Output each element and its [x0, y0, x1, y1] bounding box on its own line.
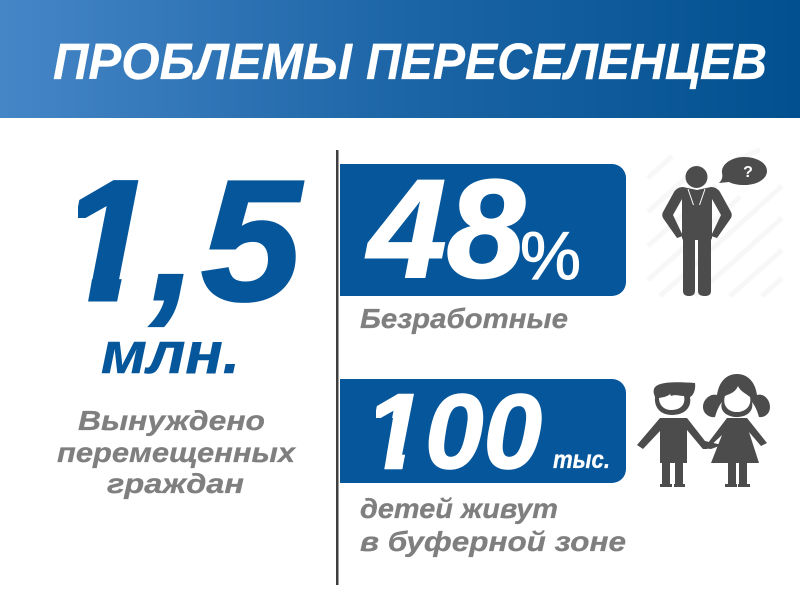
panel: children [340, 373, 626, 557]
description [57, 405, 297, 499]
title: ПЕРЕСЕЛЕНЦЕВ [366, 33, 767, 90]
title: ПРОБЛЕМЫ [53, 33, 353, 90]
description: граждан [107, 468, 244, 499]
percent sign: % [520, 218, 581, 294]
panel: unemployed [340, 150, 626, 334]
vertical divider [336, 150, 338, 585]
big number 1,5: , [148, 145, 198, 337]
unit thousand: тыс. [553, 446, 610, 474]
speech bubble [719, 157, 767, 185]
big number 1,5 [78, 180, 305, 328]
label: Безработные [360, 303, 568, 334]
big number 1,5: 5 [201, 145, 303, 337]
boy [654, 382, 695, 415]
panel: displaced citizens [57, 145, 303, 499]
label: в буферной зоне [360, 526, 626, 557]
unit: million: млн. [101, 321, 240, 386]
icon: boy and girl holding hands [637, 374, 770, 487]
header banner [0, 0, 800, 118]
value 48: 48 [365, 150, 525, 307]
value 100 [376, 393, 542, 470]
icon: man with question bubble [648, 150, 782, 296]
description: Вынуждено [78, 405, 265, 436]
girl [703, 374, 770, 417]
hatch background [648, 150, 782, 296]
icon: man with question bubble: ? [743, 164, 753, 181]
label [360, 493, 626, 557]
value 100: 1 [364, 373, 423, 491]
blue bar 48% [340, 164, 626, 296]
big number 1,5: 1 [58, 145, 154, 337]
collar lines [688, 189, 705, 205]
body and arms [662, 187, 732, 296]
blue bar 100 thousand [340, 379, 626, 483]
description: перемещенных [57, 437, 297, 468]
label: детей живут [360, 493, 558, 524]
title [53, 33, 767, 90]
value 100: 00 [425, 373, 542, 491]
